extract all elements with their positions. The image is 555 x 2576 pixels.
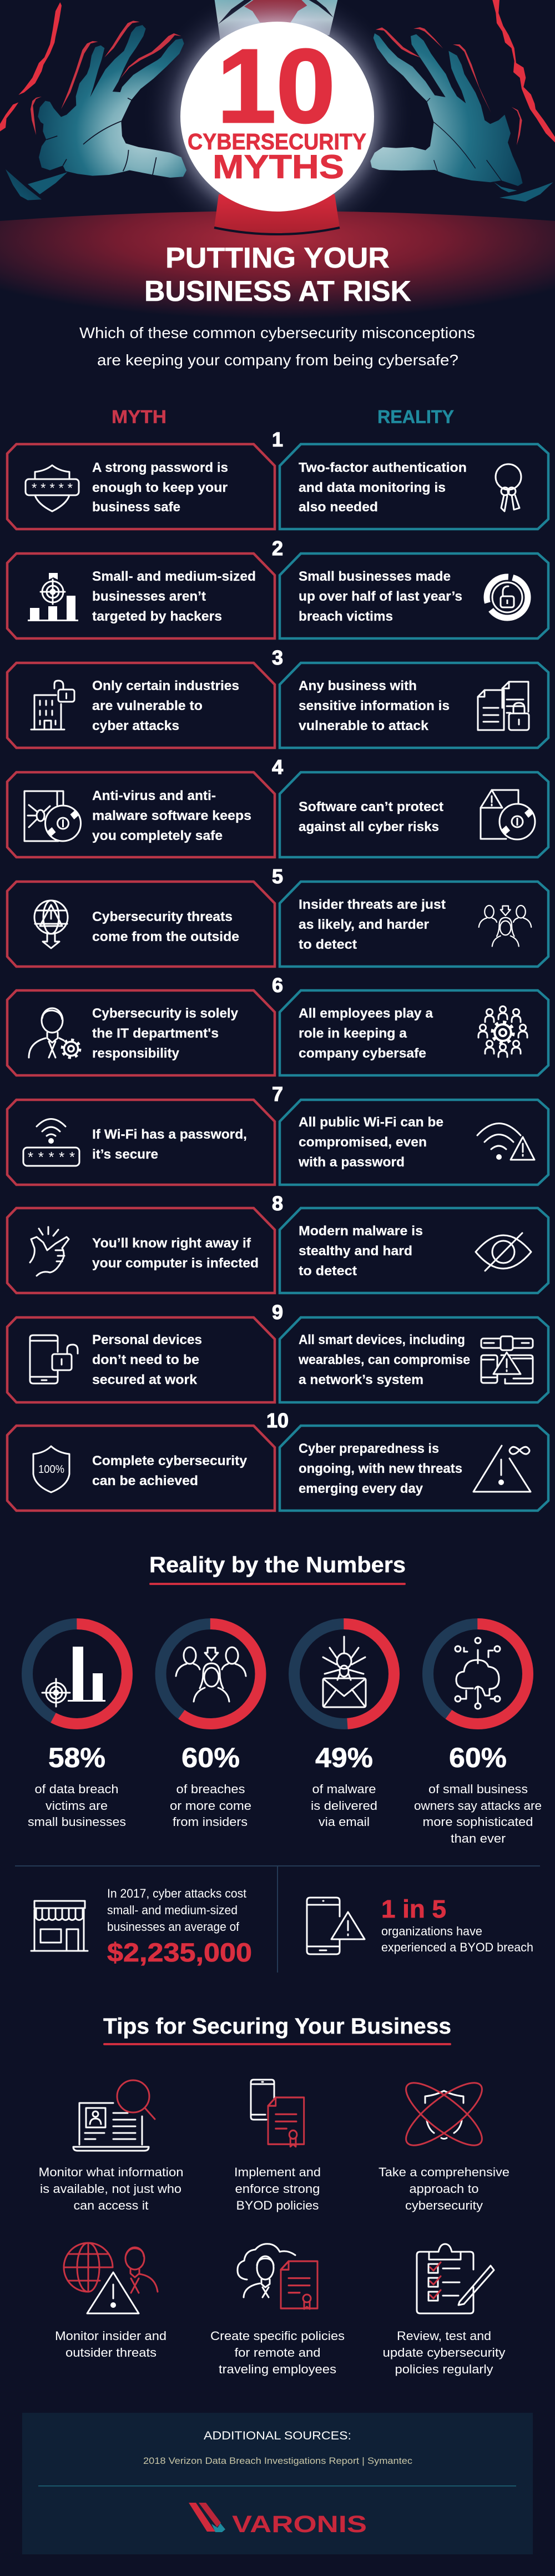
tip 2: Implement and	[234, 2165, 321, 2179]
tip 2: BYOD policies	[236, 2198, 319, 2212]
icon: insiders	[479, 905, 531, 946]
myth 1: 1	[272, 428, 283, 451]
myth 9: 9	[272, 1301, 283, 1324]
stat 60% owners: 60%	[449, 1742, 507, 1773]
tip 6: update cybersecurity	[383, 2346, 505, 2359]
logo: Varonis: VARONIS	[232, 2511, 367, 2538]
icon: shield with orbits	[398, 2073, 490, 2155]
tip 6	[383, 2244, 505, 2376]
tip 5	[210, 2244, 345, 2376]
tip 1	[39, 2080, 183, 2212]
stat 49%: is delivered	[311, 1799, 377, 1813]
left hand	[0, 2, 186, 200]
myth 3: Only certain industries	[92, 678, 239, 693]
myth 8	[7, 1192, 548, 1293]
tip 3: cybersecurity	[405, 2198, 483, 2212]
donut chart 49	[294, 1624, 394, 1724]
myth 1: Two-factor authentication	[299, 460, 467, 475]
stat 60% owners: owners say attacks are	[414, 1799, 542, 1813]
icon: cloud circuit	[455, 1638, 500, 1709]
myth 2: Small businesses made	[299, 569, 451, 584]
myth 4: you completely safe	[92, 828, 223, 843]
callout: BYOD: 1 in 5	[381, 1895, 446, 1923]
myth 4: Anti-virus and anti-	[92, 788, 216, 803]
myth 7: 7	[272, 1083, 283, 1105]
myth 3: Any business with	[299, 678, 417, 693]
icon: phone with open lock	[30, 1335, 78, 1383]
callout: cost: small- and medium-sized	[107, 1903, 238, 1917]
title	[144, 28, 411, 308]
tip 5: Create specific policies	[210, 2329, 345, 2343]
stat 60% insiders	[161, 1624, 261, 1829]
tip 2	[234, 2080, 321, 2212]
icon: insiders	[176, 1647, 246, 1702]
stat 49%: 49%	[315, 1742, 373, 1773]
myth 6: role in keeping a	[299, 1026, 407, 1041]
myth 3: sensitive information is	[299, 698, 450, 713]
myth 2	[7, 537, 548, 638]
title: MYTHS	[213, 148, 344, 185]
myth 6: 6	[272, 974, 283, 997]
callout: cost	[31, 1886, 252, 1967]
icon: infected disc	[24, 791, 81, 841]
myth 2: targeted by hackers	[92, 609, 222, 624]
stat 58%	[27, 1624, 127, 1829]
myth 8: 8	[272, 1192, 283, 1215]
myth 6: company cybersafe	[299, 1046, 426, 1061]
myth 1: A strong password is	[92, 460, 228, 475]
title: BUSINESS AT RISK	[144, 275, 411, 308]
tip 2: enforce strong	[235, 2182, 320, 2196]
myth 3: vulnerable to attack	[299, 718, 429, 733]
icon: phone warning	[307, 1898, 365, 1954]
myth 4	[7, 756, 548, 857]
myth 8: Modern malware is	[299, 1224, 423, 1239]
icon: laptop with magnifier	[73, 2080, 155, 2151]
callout: cost: $2,235,000	[107, 1938, 252, 1967]
stat 49%: via email	[319, 1815, 370, 1829]
stat 58%: 58%	[48, 1742, 105, 1773]
icon: smart devices warning	[481, 1336, 533, 1383]
myth 2: up over half of last year’s	[299, 589, 462, 604]
icon: clipboard checklist	[417, 2244, 494, 2313]
myth 5: as likely, and harder	[299, 917, 429, 932]
icon: keys	[496, 464, 521, 511]
icon: remote employee and policy	[238, 2244, 317, 2309]
myth 5: to detect	[299, 937, 357, 952]
myth 7: compromised, even	[299, 1135, 427, 1150]
myth 2: businesses aren’t	[92, 589, 206, 604]
tip 5: traveling employees	[219, 2362, 336, 2376]
tip 5: for remote and	[234, 2346, 321, 2359]
icon: 100% shield	[33, 1446, 69, 1492]
ball stand	[214, 194, 340, 235]
stat 60% insiders: of breaches	[176, 1782, 245, 1796]
icon: infinite warning	[473, 1446, 531, 1492]
title: 10	[217, 28, 335, 145]
myth 5: Cybersecurity threats	[92, 909, 233, 924]
sources text: 2018 Verizon Data Breach Investigations Report | Symantec	[143, 2456, 413, 2466]
myth 9	[7, 1301, 548, 1402]
column heading: myth: MYTH	[112, 406, 167, 427]
icon: wifi warning	[477, 1124, 534, 1160]
myth 9: wearables, can compromise	[298, 1352, 470, 1367]
donut chart 60	[428, 1624, 528, 1724]
stat 60% owners: of small business	[428, 1782, 528, 1796]
myth 10: can be achieved	[92, 1473, 198, 1488]
logo: Varonis	[189, 2503, 367, 2538]
myth 10	[7, 1409, 548, 1511]
stat 60% owners	[414, 1624, 542, 1845]
glow around ball	[142, 0, 413, 250]
heading: tips for securing your business: Tips for Securing Your Business	[103, 2014, 451, 2039]
icon: wifi password	[23, 1119, 79, 1166]
tip 3: Take a comprehensive	[379, 2165, 509, 2179]
tip 1: can access it	[73, 2198, 149, 2212]
donut chart 58	[27, 1624, 127, 1724]
callout: cost: businesses an average of	[107, 1920, 240, 1934]
icon: circular lock	[487, 577, 528, 618]
icon: globe threat arrow	[34, 900, 68, 948]
myth 9: Personal devices	[92, 1332, 202, 1347]
callout: BYOD	[307, 1895, 533, 1954]
icon: employees around gear	[478, 1006, 527, 1057]
icon: IT manager with gear	[29, 1008, 80, 1058]
myth 1: and data monitoring is	[299, 480, 446, 495]
myth 3	[7, 646, 548, 748]
myth 5: 5	[272, 865, 283, 888]
icon: phone and policy	[251, 2080, 304, 2147]
additional sources heading: ADDITIONAL SOURCES:	[204, 2429, 351, 2442]
myth 4: malware software keeps	[92, 808, 251, 823]
stat 60% insiders: from insiders	[173, 1815, 248, 1829]
crystal ball	[180, 22, 374, 212]
myth 3: 3	[272, 646, 283, 669]
icon: warning disc	[481, 790, 535, 839]
stat 58%: victims are	[46, 1799, 108, 1813]
tip 3	[379, 2073, 509, 2212]
myth 10: emerging every day	[299, 1481, 423, 1496]
icon: globe, person and warning	[64, 2243, 158, 2313]
icon: password shield	[26, 465, 79, 511]
myth 7: All public Wi-Fi can be	[299, 1115, 443, 1130]
tip 3: approach to	[410, 2182, 478, 2196]
donut chart 60	[161, 1624, 261, 1724]
icon: snapping hand	[30, 1227, 69, 1276]
myth 4: Software can’t protect	[299, 799, 443, 814]
myth 8: stealthy and hard	[299, 1244, 412, 1259]
stat 49%	[294, 1624, 394, 1829]
intro text	[79, 324, 475, 369]
heading: reality by the numbers: Reality by the Numbers	[149, 1553, 406, 1577]
footer panel	[22, 2413, 533, 2554]
myth 6: the IT department's	[92, 1026, 219, 1041]
myth 3: are vulnerable to	[92, 698, 203, 713]
icon: password shield: *****	[32, 481, 73, 496]
myth 10: 10	[266, 1409, 289, 1432]
figure hood behind crystal ball	[215, 0, 337, 40]
myth 1: also needed	[299, 500, 378, 515]
myth 6	[7, 974, 548, 1075]
icon: target bars	[42, 1647, 105, 1707]
myth 3: cyber attacks	[92, 718, 179, 733]
right hand	[370, 0, 555, 202]
stat 60% insiders: or more come	[170, 1799, 251, 1813]
tip 4: outsider threats	[65, 2346, 157, 2359]
stat 60% insiders: 60%	[181, 1742, 240, 1773]
tip 4: Monitor insider and	[55, 2329, 167, 2343]
stat 49%: of malware	[312, 1782, 376, 1796]
myth 9: don’t need to be	[92, 1352, 199, 1367]
myth 5: come from the outside	[92, 929, 239, 944]
myth 5: Insider threats are just	[299, 897, 446, 912]
callout: BYOD: experienced a BYOD breach	[381, 1940, 533, 1954]
myth 1: enough to keep your	[92, 480, 228, 495]
myth 7	[7, 1083, 548, 1185]
header illustration	[0, 0, 555, 333]
myth 9: secured at work	[92, 1372, 198, 1387]
myth 2: breach victims	[299, 609, 393, 624]
myth 6: Cybersecurity is solely	[92, 1006, 239, 1021]
myth 10: Complete cybersecurity	[92, 1453, 248, 1468]
tip 6: policies regularly	[395, 2362, 493, 2376]
icon: 100% shield: 100%	[38, 1463, 64, 1476]
title: PUTTING YOUR	[165, 242, 390, 274]
stat 60% owners: than ever	[451, 1832, 506, 1845]
title: CYBERSECURITY	[188, 129, 366, 154]
myth 10: ongoing, with new threats	[299, 1461, 462, 1476]
myth 6: responsibility	[92, 1046, 180, 1061]
stat 58%: of data breach	[34, 1782, 119, 1796]
table	[0, 211, 555, 333]
myth 7: If Wi-Fi has a password,	[92, 1127, 247, 1142]
myth 1: business safe	[92, 500, 180, 515]
myth 8: your computer is infected	[92, 1256, 259, 1271]
icon: documents with lock	[478, 682, 529, 730]
tip 1: Monitor what information	[39, 2165, 183, 2179]
myth 7: with a password	[298, 1155, 405, 1170]
myth 4: 4	[272, 756, 283, 778]
column heading: reality: REALITY	[377, 406, 454, 427]
myth 5	[7, 865, 548, 967]
icon: storefront	[31, 1901, 88, 1951]
intro text: Which of these common cybersecurity misconceptions	[79, 324, 475, 341]
myth 2: 2	[272, 537, 283, 560]
icon: crossed eye	[476, 1233, 531, 1271]
icon: wifi password: *****	[28, 1149, 75, 1165]
icon: building with lock	[31, 681, 74, 729]
intro text: are keeping your company from being cybersafe?	[97, 351, 458, 369]
myth 10: Cyber preparedness is	[299, 1441, 439, 1456]
tip 1: is available, not just who	[40, 2182, 181, 2196]
myth 2: Small- and medium-sized	[92, 569, 256, 584]
callout: BYOD: organizations have	[381, 1924, 482, 1938]
stat 60% owners: more sophisticated	[423, 1815, 533, 1829]
tip 4	[55, 2243, 167, 2359]
icon: spider on email	[323, 1637, 366, 1707]
myth 4: against all cyber risks	[299, 819, 439, 834]
myth 8: You’ll know right away if	[92, 1236, 251, 1251]
tip 6: Review, test and	[397, 2329, 491, 2343]
myth 9: a network’s system	[299, 1372, 423, 1387]
myth 7: it’s secure	[92, 1147, 158, 1162]
myth 9: All smart devices, including	[299, 1332, 465, 1347]
callout: cost: In 2017, cyber attacks cost	[107, 1886, 246, 1900]
myth 8: to detect	[299, 1264, 357, 1279]
myth 6: All employees play a	[299, 1006, 433, 1021]
icon: targeted bars	[28, 573, 78, 621]
stat 58%: small businesses	[28, 1815, 126, 1829]
myth 1	[7, 428, 548, 529]
